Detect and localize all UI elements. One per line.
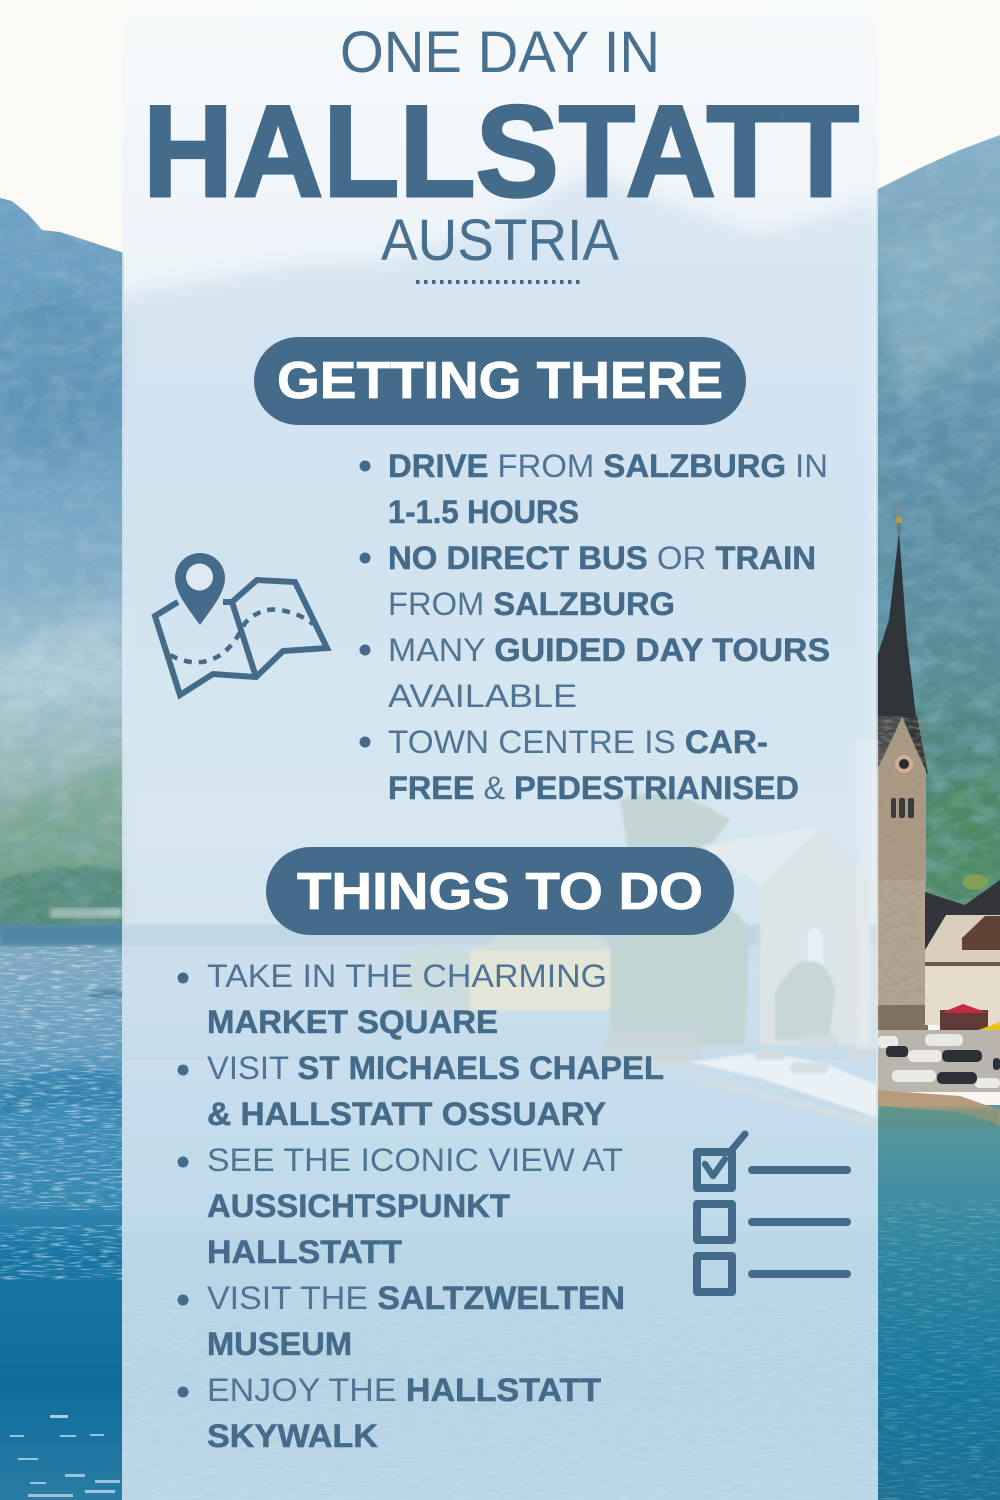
lake glints <box>10 1415 120 1497</box>
icon: map with location pin <box>155 553 327 695</box>
list: getting there: 1-1.5 HOURS <box>388 494 579 530</box>
list: things to do: SKYWALK <box>207 1418 378 1454</box>
list: getting there: MANY GUIDED DAY TOURS <box>388 632 830 668</box>
list: getting there: DRIVE FROM SALZBURG IN <box>388 448 828 484</box>
list: things to do: MARKET SQUARE <box>207 1004 498 1040</box>
list: getting there: FREE & PEDESTRIANISED <box>388 770 799 806</box>
list: getting there <box>360 448 830 806</box>
translucent central panel <box>122 0 878 1500</box>
town shoreline behind panel <box>122 793 878 1128</box>
list: things to do: MUSEUM <box>207 1326 352 1362</box>
list: things to do: VISIT ST MICHAELS CHAPEL <box>207 1050 664 1086</box>
list: things to do: VISIT THE SALTZWELTEN <box>207 1280 625 1316</box>
list: getting there: AVAILABLE <box>388 678 577 714</box>
list: getting there: FROM SALZBURG <box>388 586 675 622</box>
list: things to do <box>178 958 664 1454</box>
central hazy mountains <box>100 170 878 940</box>
title: Hallstatt: HALLSTATT <box>143 78 859 224</box>
title: one day in: ONE DAY IN <box>340 20 660 85</box>
heading: things to do: THINGS TO DO <box>297 863 703 921</box>
list: getting there: NO DIRECT BUS OR TRAIN <box>388 540 816 576</box>
list: things to do: HALLSTATT <box>207 1234 402 1270</box>
icon: checklist <box>697 1134 847 1292</box>
title: Austria: AUSTRIA <box>381 208 619 273</box>
church tower and spire <box>876 503 928 1035</box>
bullets <box>360 460 370 748</box>
lakeside buildings and cars <box>876 874 1000 1130</box>
left mountain <box>0 198 124 940</box>
lake ripples <box>0 945 1000 1500</box>
heading: getting there: GETTING THERE <box>277 352 723 410</box>
list: things to do: AUSSICHTSPUNKT <box>207 1188 510 1224</box>
list: things to do: ENJOY THE HALLSTATT <box>207 1372 601 1408</box>
list: getting there: TOWN CENTRE IS CAR- <box>388 724 768 760</box>
heading: getting there <box>254 337 746 425</box>
list: things to do: TAKE IN THE CHARMING <box>207 958 607 994</box>
list: things to do: SEE THE ICONIC VIEW AT <box>207 1142 623 1178</box>
right mountain <box>876 135 1000 960</box>
heading: things to do <box>266 847 734 935</box>
bullets <box>178 972 188 1398</box>
title block <box>143 20 859 273</box>
lake <box>0 925 880 1500</box>
list: things to do: & HALLSTATT OSSUARY <box>207 1096 606 1132</box>
